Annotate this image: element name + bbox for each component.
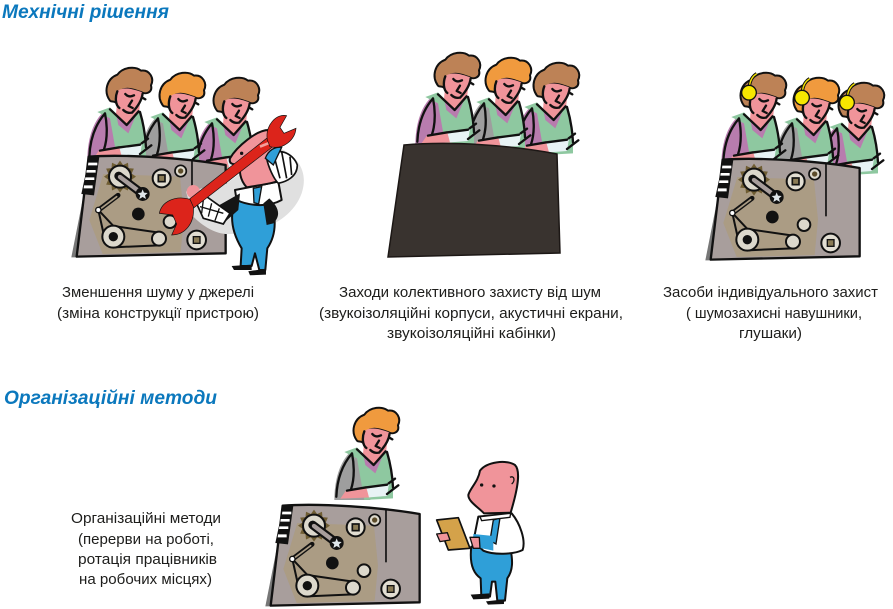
caption: organizational methods [71,511,221,588]
machine four [265,505,420,606]
workers group three [721,73,884,175]
machine three [705,159,860,260]
caption: organizational methods: Організаційні методи [71,511,221,527]
caption: personal protection: глушаки) [739,326,802,342]
heading: technical solutions: Мехнічні рішення [2,2,169,23]
mechanic with wrench [159,115,304,275]
caption: collective protection: Заходи колективного захисту від шум [339,285,601,301]
caption: noise reduction at the source: Зменшення шуму у джерелі [62,285,254,301]
caption: collective protection: звукоізоляційні кабінки) [387,326,556,342]
caption: collective protection: (звукоізоляційні корпуси, акустичні екрани, [319,306,623,322]
supervisor with clipboard [437,462,524,605]
illustration: noise reduction at the source [71,68,304,275]
illustration: collective protection enclosure [388,53,579,257]
caption: noise reduction at the source [57,285,259,322]
caption: personal protection [663,285,878,342]
caption: noise reduction at the source: (зміна конструкції пристрою) [57,306,259,322]
caption: personal protection: Засоби індивідуального захист [663,285,878,301]
acoustic enclosure box [388,143,560,257]
caption: organizational methods: на робочих місцях) [79,572,212,588]
illustration: personal protection with headphones [705,73,884,260]
caption: organizational methods: (перерви на роботі, [78,532,214,548]
illustration: single worker at machine [265,408,420,606]
worker four [334,408,399,500]
workers group two [415,53,579,155]
caption: personal protection: ( шумозахисні навушники, [686,306,862,322]
workers group one [87,68,259,170]
caption: collective protection [319,285,623,342]
machine one [71,156,226,257]
caption: organizational methods: ротація працівників [78,552,217,568]
heading: organizational methods: Організаційні методи [4,388,217,409]
